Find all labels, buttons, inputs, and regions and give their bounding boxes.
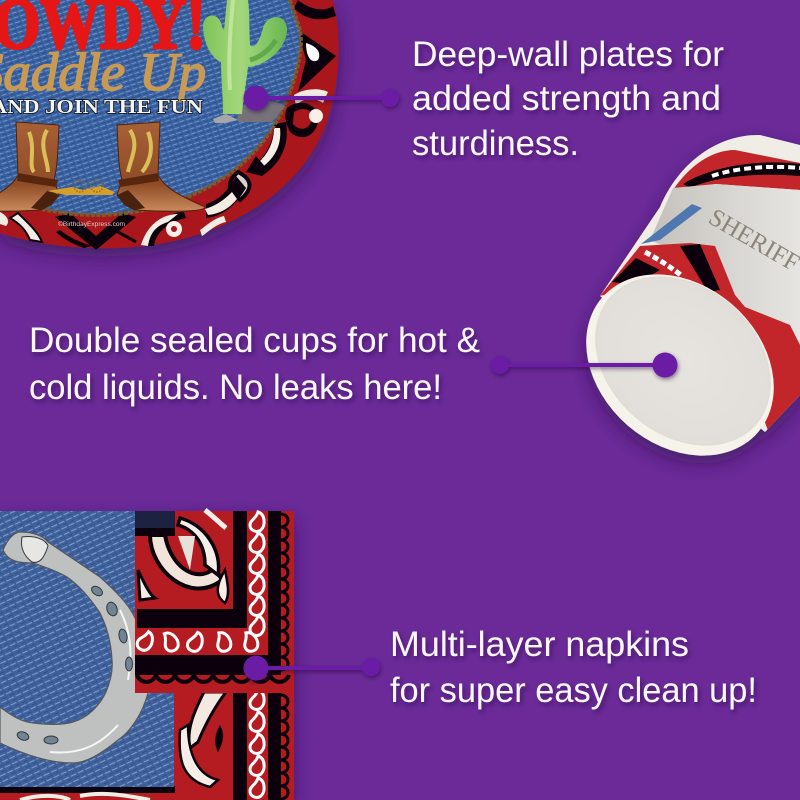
caption: cups: cold liquids. No leaks here! xyxy=(29,368,442,407)
cup body with print xyxy=(600,135,800,436)
caption: plates xyxy=(412,35,724,163)
callout line: napkins xyxy=(244,656,380,680)
callout line: cups xyxy=(491,352,678,378)
cup xyxy=(578,134,800,472)
caption: napkins xyxy=(390,625,757,710)
cup base xyxy=(550,237,800,493)
plate xyxy=(0,0,339,250)
caption: plates: added strength and xyxy=(412,79,721,118)
caption: cups xyxy=(29,321,480,407)
plate heading text xyxy=(0,0,206,228)
napkin folded corner xyxy=(135,510,294,693)
caption: plates: sturdiness. xyxy=(412,124,579,163)
caption: napkins: for super easy clean up! xyxy=(390,671,757,710)
napkin xyxy=(0,510,294,800)
plate heading text: ©BirthdayExpress.com xyxy=(58,220,125,228)
napkin red field xyxy=(0,511,294,800)
plate rim: bandana border xyxy=(0,0,339,250)
caption: plates: Deep-wall plates for xyxy=(412,35,724,74)
plate center: denim field xyxy=(0,0,301,215)
napkin denim panel xyxy=(0,511,174,787)
napkin lower border stripes xyxy=(180,690,288,800)
caption: cups: Double sealed cups for hot & xyxy=(29,321,480,360)
cactus and rock xyxy=(203,0,287,123)
caption: napkins: Multi-layer napkins xyxy=(390,625,689,664)
horseshoe xyxy=(0,532,149,763)
cowboy boots xyxy=(0,122,205,211)
callout line: plates xyxy=(244,86,399,110)
